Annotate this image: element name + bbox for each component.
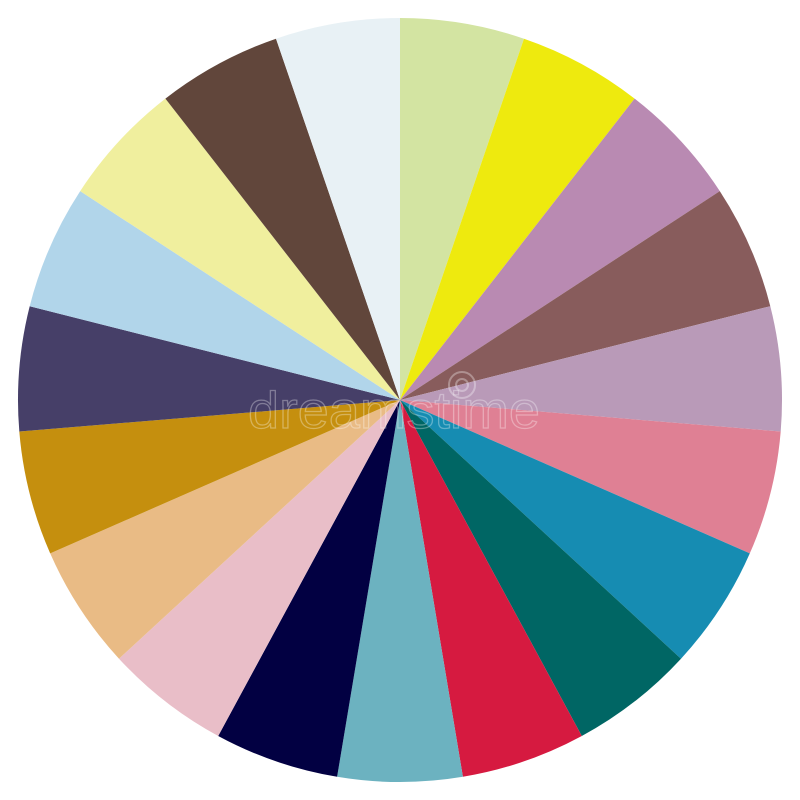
watermark logo	[449, 372, 475, 398]
watermark	[248, 372, 540, 440]
watermark text: dreamstime	[248, 382, 540, 440]
